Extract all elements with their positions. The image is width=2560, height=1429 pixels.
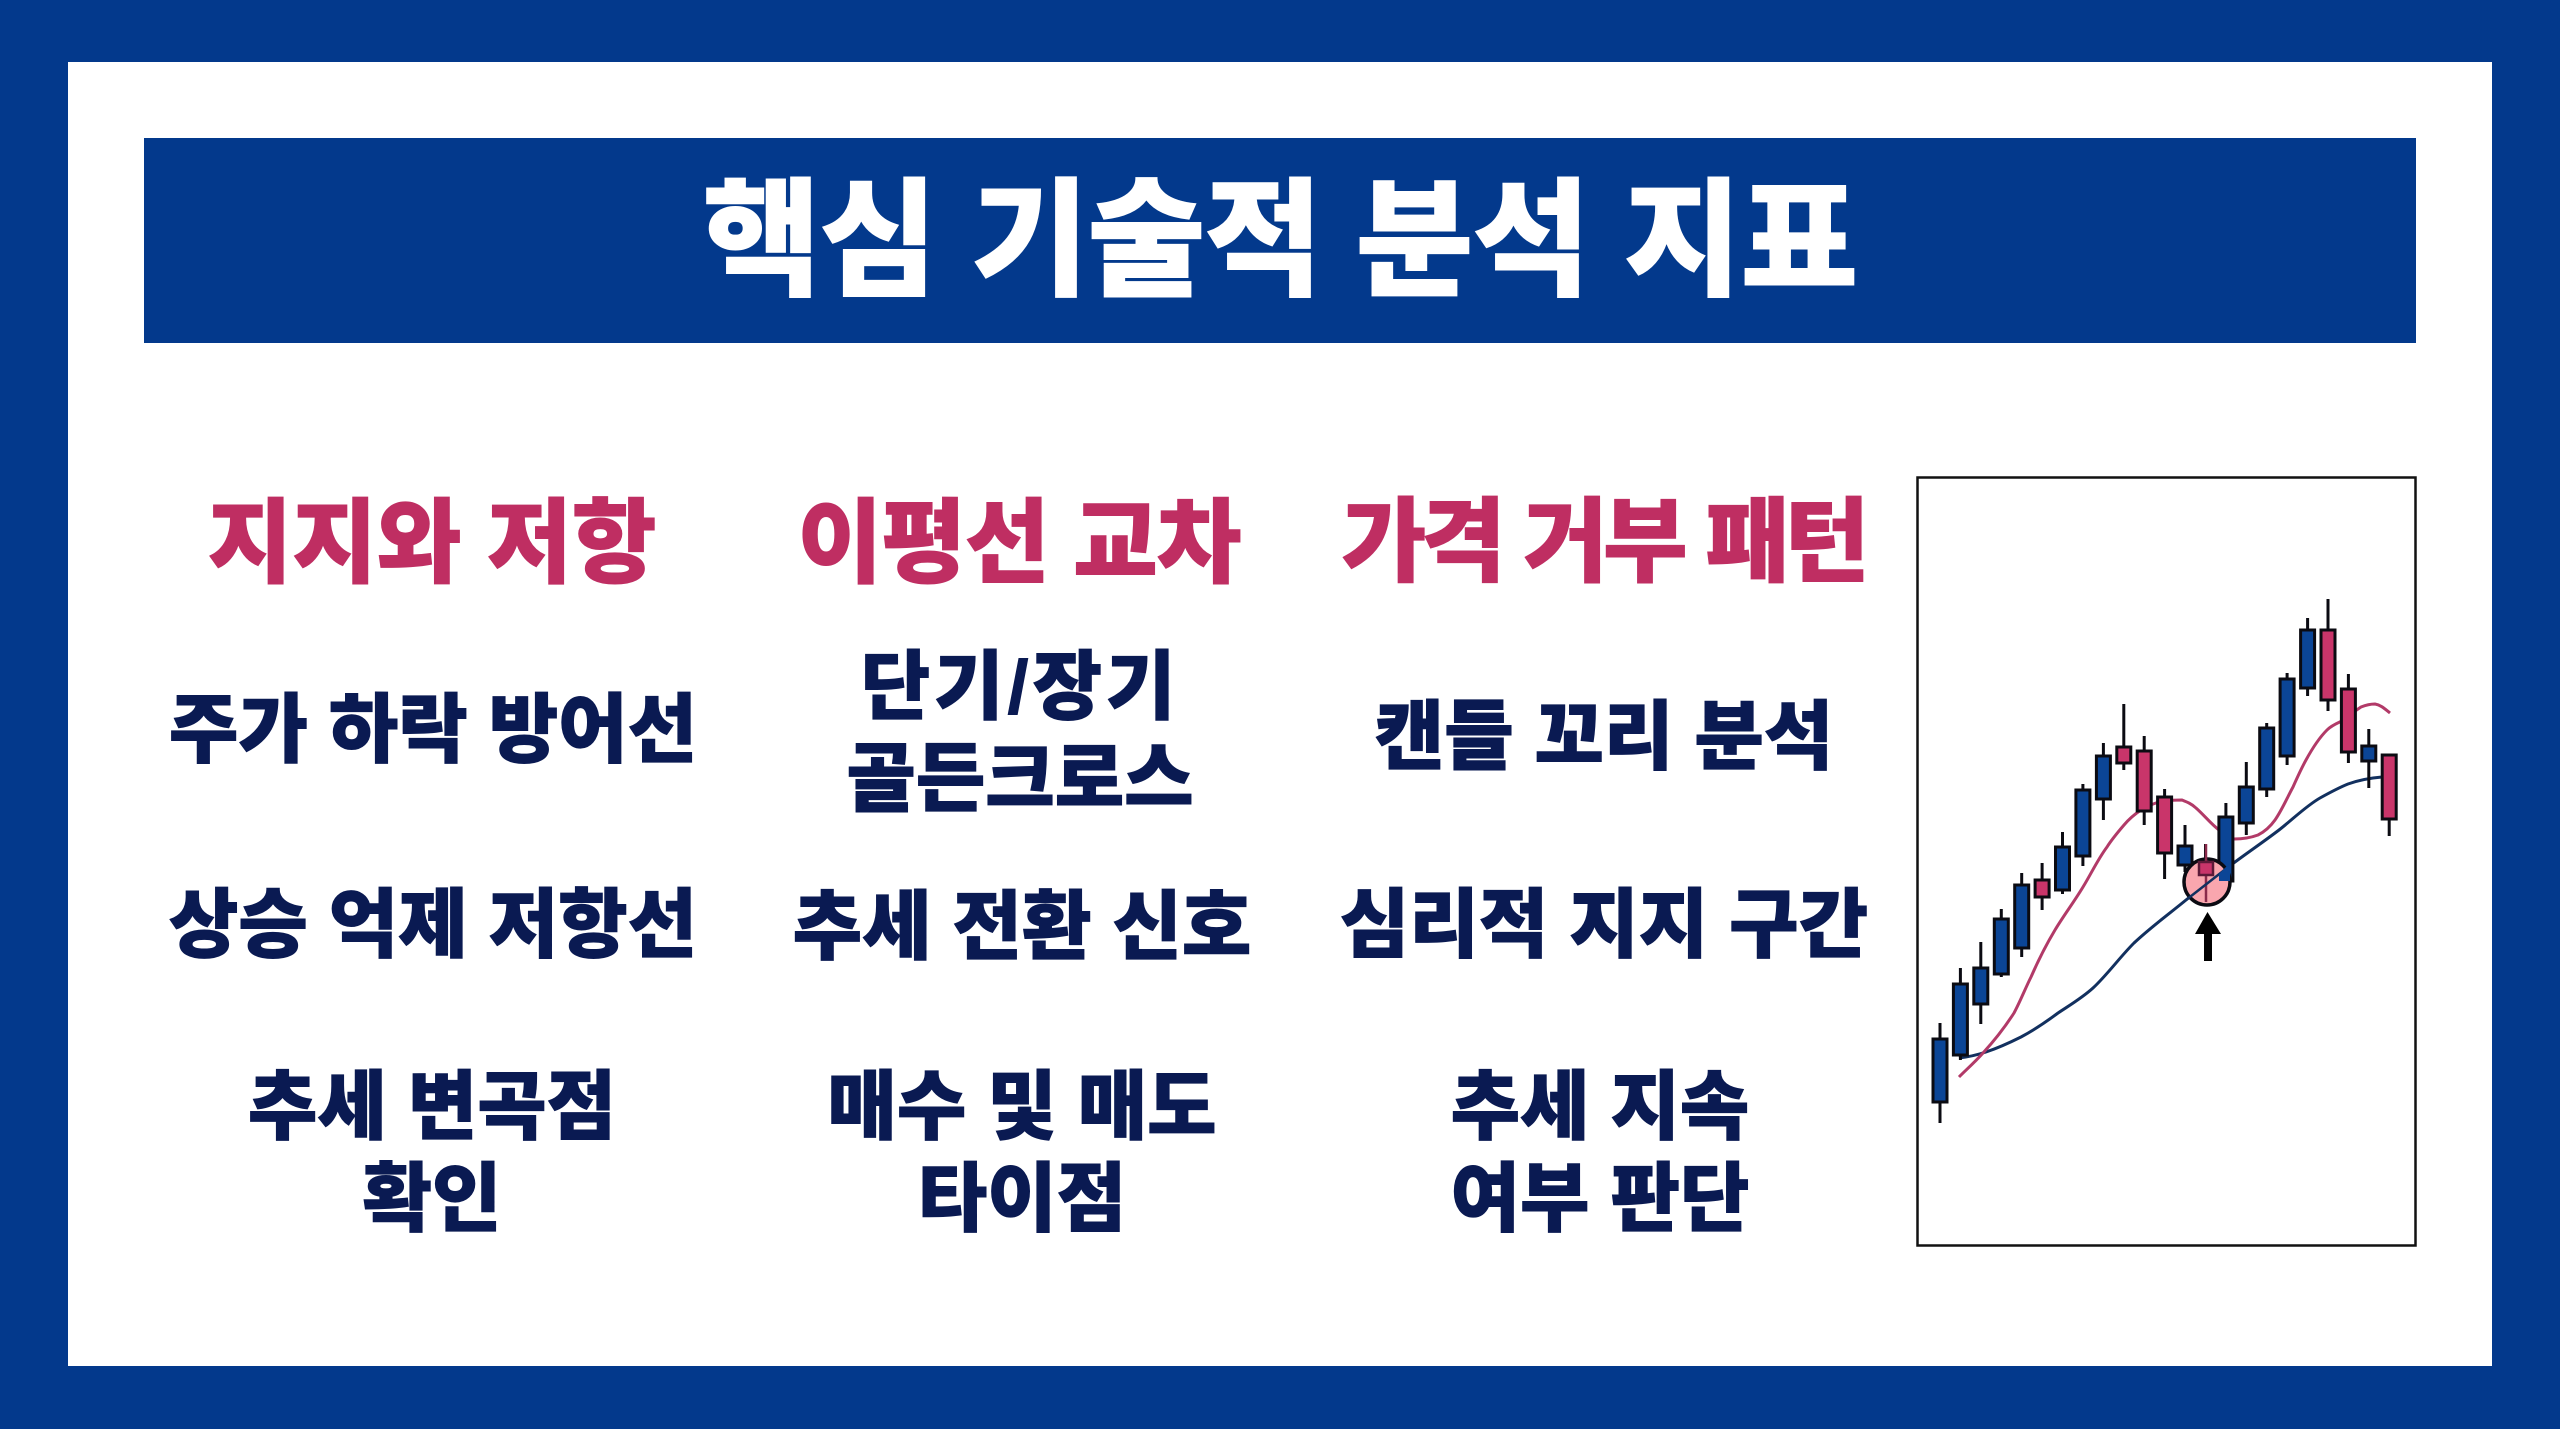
text: column 1 row 3: 확인 <box>363 1157 501 1241</box>
text: column 3 row 3: 추세 지속 <box>1451 1065 1749 1149</box>
candles <box>1933 599 2396 1123</box>
title: 핵심 기술적 분석 지표 <box>703 170 1857 313</box>
text: column 1 row 3: 추세 변곡점 <box>248 1065 616 1149</box>
text: column 1 row 2: 상승 억제 저항선 <box>169 883 697 967</box>
text: column 1 row 3 <box>248 1065 616 1241</box>
heading: price rejection pattern: 가격 거부 패턴 <box>1342 492 1864 594</box>
short moving average line <box>1959 704 2390 1077</box>
text: column 2 row 1 <box>846 645 1194 821</box>
text: column 3 row 1: 캔들 꼬리 분석 <box>1375 695 1833 779</box>
text: column 2 row 3: 타이점 <box>918 1157 1126 1241</box>
long moving average line <box>1959 777 2382 1058</box>
title band <box>144 138 2416 343</box>
candlestick chart panel <box>1916 476 2417 1247</box>
text: column 3 row 3 <box>1451 1065 1749 1241</box>
heading: moving average cross: 이평선 교차 <box>798 493 1240 595</box>
text: column 1 row 1: 주가 하락 방어선 <box>169 688 697 772</box>
text: column 2 row 1: 골든크로스 <box>846 737 1194 821</box>
text: column 3 row 2: 심리적 지지 구간 <box>1340 883 1868 967</box>
heading: support and resistance: 지지와 저항 <box>208 493 656 595</box>
text: column 3 row 3: 여부 판단 <box>1451 1157 1749 1241</box>
text: column 2 row 1: 단기/장기 <box>861 645 1179 729</box>
arrow pointing to candle <box>2195 912 2221 961</box>
text: column 2 row 3 <box>827 1065 1217 1241</box>
text: column 2 row 3: 매수 및 매도 <box>827 1065 1217 1149</box>
highlighted rejection candle <box>2184 844 2230 905</box>
text: column 2 row 2: 추세 전환 신호 <box>793 885 1251 969</box>
